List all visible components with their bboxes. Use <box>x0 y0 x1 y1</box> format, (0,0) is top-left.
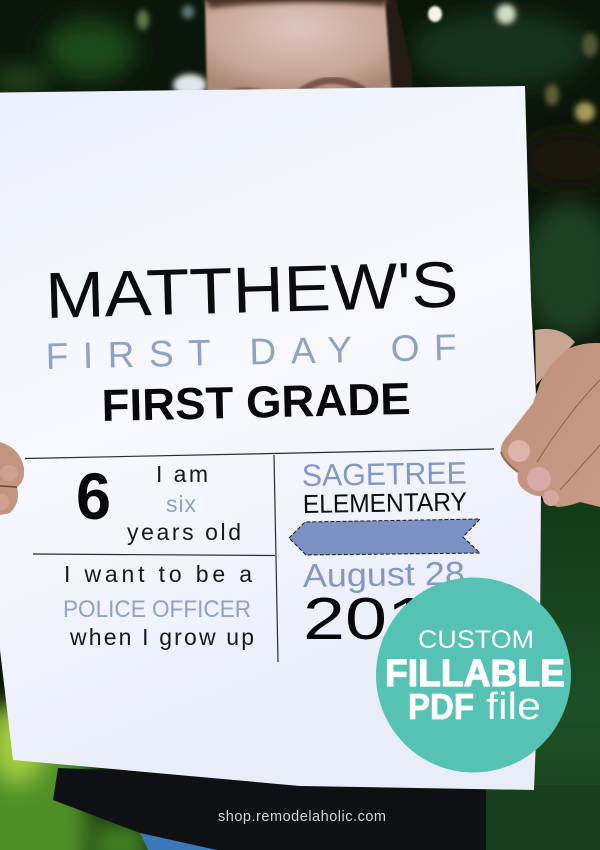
right hand <box>501 343 600 507</box>
badge: custom fillable PDF file: FILLABLE <box>385 653 565 695</box>
black shirt <box>53 768 486 850</box>
age text: years old <box>127 519 241 545</box>
boy's head behind the page <box>200 0 412 96</box>
age text <box>127 461 241 545</box>
paper sheet <box>0 86 541 790</box>
career text <box>63 561 254 650</box>
badge: custom fillable PDF file: CUSTOM <box>418 626 534 654</box>
year: 2015 <box>303 586 471 652</box>
date: August 28 <box>303 554 465 594</box>
career text: POLICE OFFICER <box>63 596 251 623</box>
worksheet printed content <box>25 247 494 662</box>
left hand <box>0 442 24 515</box>
blue jeans <box>140 833 217 850</box>
career text: I want to be a <box>64 561 252 587</box>
worksheet printed content: ELEMENTARY <box>303 486 467 519</box>
title: name: MATTHEW'S <box>44 247 459 332</box>
ribbon banner <box>289 519 480 555</box>
badge: custom fillable PDF file: file <box>486 686 541 728</box>
title: grade: FIRST GRADE <box>101 373 411 431</box>
badge: custom fillable PDF file <box>376 578 571 772</box>
footer source text: shop.remodelaholic.com <box>218 809 386 825</box>
badge: custom fillable PDF file: PDF <box>408 686 474 727</box>
career text: when I grow up <box>69 624 254 650</box>
divider lines <box>25 449 494 662</box>
age text: I am <box>156 461 208 487</box>
age text: six <box>166 491 196 517</box>
right arm behind page <box>535 329 575 385</box>
subtitle: first day of: FIRST DAY OF <box>45 327 457 377</box>
age number: 6 <box>76 459 111 533</box>
school name: SAGETREE <box>302 455 467 493</box>
